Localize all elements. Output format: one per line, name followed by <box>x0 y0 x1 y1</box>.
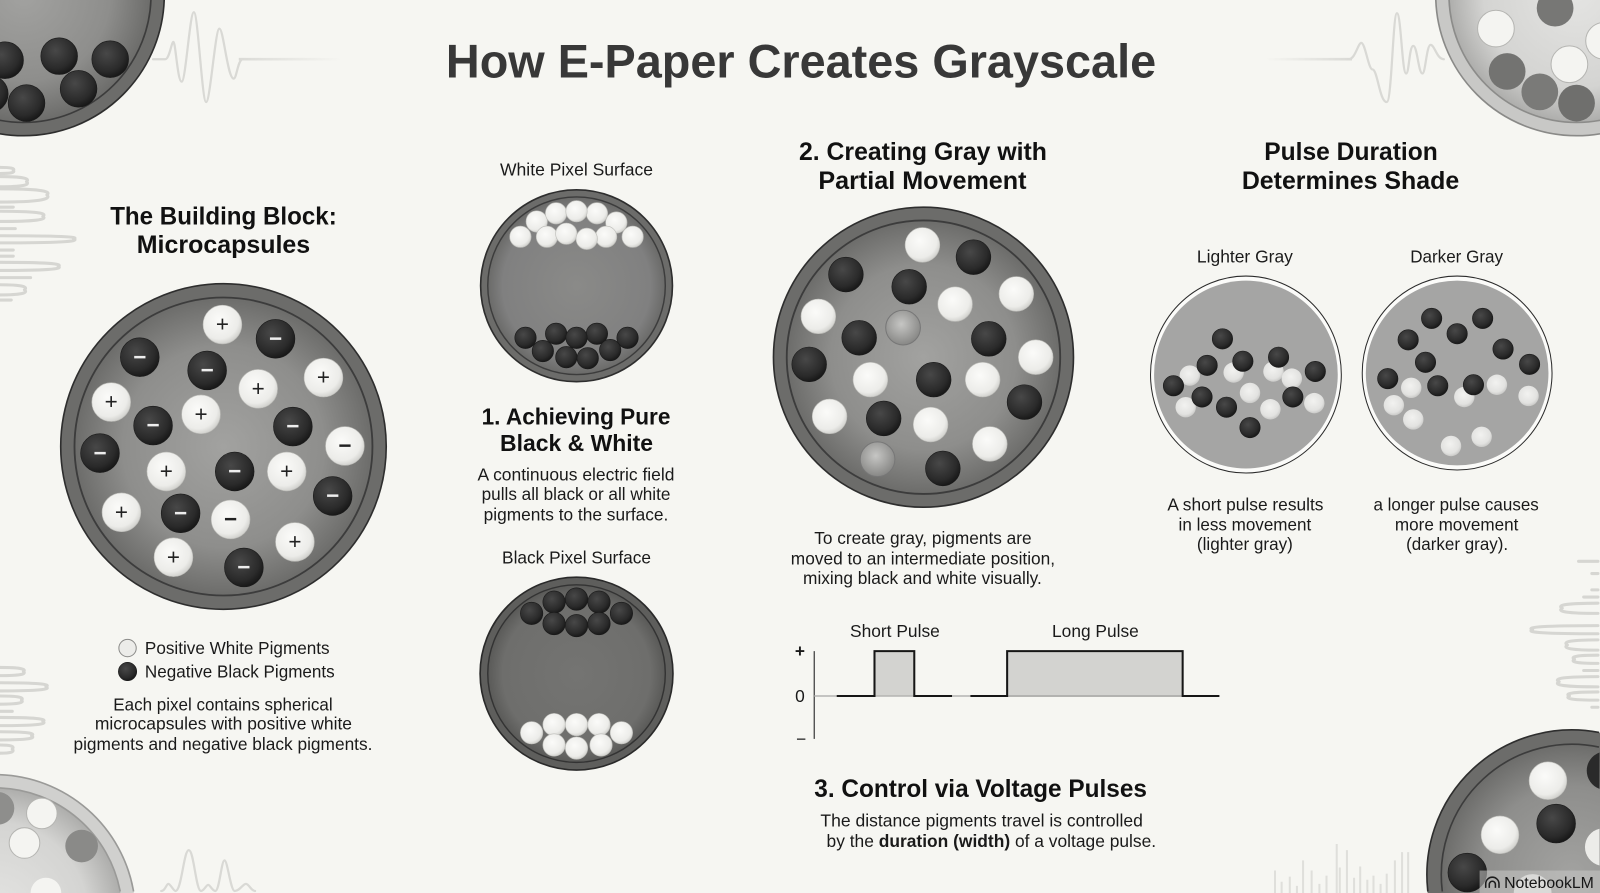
capsule: intermediate pigments <box>773 207 1073 507</box>
microcapsule with charged pigments: + <box>115 499 128 524</box>
description: electric field <box>478 465 674 524</box>
title: How E-Paper Creates Grayscale <box>446 36 1156 88</box>
description: long pulse: more movement <box>1395 515 1518 535</box>
description: short pulse: in less movement <box>1179 515 1311 535</box>
description: electric field: pulls all black or all white <box>482 484 670 504</box>
heading: achieving pure black and white: Black & White <box>500 430 653 456</box>
capsule: white pixel surface <box>481 190 672 382</box>
heading: the building block: The Building Block: <box>110 203 337 231</box>
microcapsule with charged pigments: − <box>237 555 250 580</box>
label: white pixel surface: White Pixel Surface <box>500 160 653 180</box>
microcapsule with charged pigments: − <box>338 433 351 458</box>
legend: Negative Black Pigments <box>145 662 335 682</box>
description: electric field: A continuous electric field <box>478 465 674 485</box>
description: microcapsules <box>73 694 372 754</box>
description: short pulse <box>1167 494 1324 554</box>
panel: creating gray with partial movement <box>773 138 1073 588</box>
axis labels: + <box>795 641 805 661</box>
microcapsule with charged pigments: + <box>167 544 180 569</box>
corner capsule: top left <box>0 0 164 136</box>
microcapsule with charged pigments: + <box>105 389 118 414</box>
heading: creating gray: 2. Creating Gray with <box>799 138 1047 166</box>
axis labels: 0 <box>795 686 805 706</box>
label: lighter gray: Lighter Gray <box>1197 246 1293 266</box>
description: voltage pulses: by the duration (width) of a voltage pulse. <box>827 831 1156 851</box>
panel: building block microcapsules <box>61 203 386 754</box>
heading: control via voltage pulses: 3. Control via Voltage Pulses <box>814 775 1147 803</box>
corner capsule: bottom left <box>0 775 134 893</box>
decorative wave: top left <box>153 12 342 102</box>
capsule: darker gray <box>1362 276 1552 470</box>
microcapsule with charged pigments: − <box>224 507 237 532</box>
microcapsule with charged pigments: − <box>93 440 107 465</box>
microcapsule with charged pigments: + <box>216 312 229 337</box>
badge: NotebookLM: NotebookLM <box>1504 875 1594 892</box>
heading: achieving pure black and white <box>482 404 670 456</box>
description: voltage pulses: The distance pigments travel is controlled <box>820 811 1143 831</box>
description: electric field: pigments to the surface. <box>484 504 668 524</box>
description: creating gray: moved to an intermediate position, <box>791 548 1055 568</box>
microcapsule with charged pigments <box>61 284 386 609</box>
description: microcapsules: Each pixel contains spherical <box>113 694 333 714</box>
label: long pulse: Long Pulse <box>1052 621 1139 641</box>
description: voltage pulses <box>820 811 1156 851</box>
microcapsule with charged pigments: + <box>160 459 173 484</box>
decorative wave: left lower <box>0 667 47 753</box>
badge: NotebookLM <box>1480 871 1600 893</box>
axis <box>813 651 815 739</box>
decorative wave: bottom left <box>161 850 255 891</box>
microcapsule with charged pigments: + <box>317 365 330 390</box>
legend <box>118 638 335 682</box>
microcapsule with charged pigments: − <box>228 459 241 484</box>
description: creating gray: To create gray, pigments are <box>814 528 1032 548</box>
label: black pixel surface: Black Pixel Surface <box>502 547 651 567</box>
description: short pulse: A short pulse results <box>1167 494 1324 514</box>
description: long pulse: a longer pulse causes <box>1373 494 1539 514</box>
decorative wave: bottom right bars <box>1275 844 1408 893</box>
chart: voltage pulses <box>795 621 1219 851</box>
microcapsule with charged pigments: − <box>201 358 214 383</box>
heading: creating gray <box>799 138 1047 195</box>
heading: pulse duration: Pulse Duration <box>1264 138 1438 166</box>
description: long pulse: (darker gray). <box>1406 534 1508 554</box>
capsule: lighter gray <box>1151 276 1341 473</box>
microcapsule with charged pigments: − <box>326 483 339 508</box>
short pulse waveform <box>814 651 1219 696</box>
microcapsule with charged pigments: − <box>286 414 299 439</box>
heading: pulse duration <box>1242 138 1459 195</box>
microcapsule with charged pigments: + <box>280 459 293 484</box>
microcapsule with charged pigments: − <box>147 413 160 438</box>
microcapsule with charged pigments: + <box>194 401 208 426</box>
description: long pulse <box>1373 494 1539 554</box>
microcapsule with charged pigments: − <box>133 344 146 369</box>
capsule: black pixel surface <box>480 577 673 770</box>
long pulse waveform <box>970 651 1219 696</box>
microcapsule with charged pigments: − <box>174 500 187 525</box>
heading: pulse duration: Determines Shade <box>1242 167 1459 195</box>
corner capsule: top right <box>1436 0 1600 136</box>
decorative wave: top right <box>1265 13 1444 102</box>
label: short pulse: Short Pulse <box>850 621 940 641</box>
description: creating gray <box>791 528 1055 588</box>
microcapsule with charged pigments: + <box>288 529 301 554</box>
description: short pulse: (lighter gray) <box>1197 534 1293 554</box>
decorative wave: left upper <box>0 167 75 300</box>
heading: achieving pure black and white: 1. Achieving Pure <box>482 404 670 430</box>
description: microcapsules: pigments and negative black pigments. <box>73 734 372 754</box>
axis labels <box>795 641 806 749</box>
panel: pulse duration determines shade <box>1151 138 1552 554</box>
axis labels: − <box>796 729 806 749</box>
heading: the building block: Microcapsules <box>137 231 310 259</box>
microcapsule with charged pigments: + <box>252 376 265 401</box>
heading: the building block <box>110 203 337 259</box>
decorative wave: right <box>1531 561 1598 707</box>
label: darker gray: Darker Gray <box>1410 246 1503 266</box>
corner capsule: bottom right <box>1426 730 1600 893</box>
panel: achieving pure black and white <box>478 160 674 770</box>
description: microcapsules: microcapsules with positive white <box>95 714 352 734</box>
legend: Positive White Pigments <box>145 638 330 658</box>
description: creating gray: mixing black and white visually. <box>803 568 1042 588</box>
heading: creating gray: Partial Movement <box>818 167 1027 195</box>
microcapsule with charged pigments: − <box>269 326 282 351</box>
